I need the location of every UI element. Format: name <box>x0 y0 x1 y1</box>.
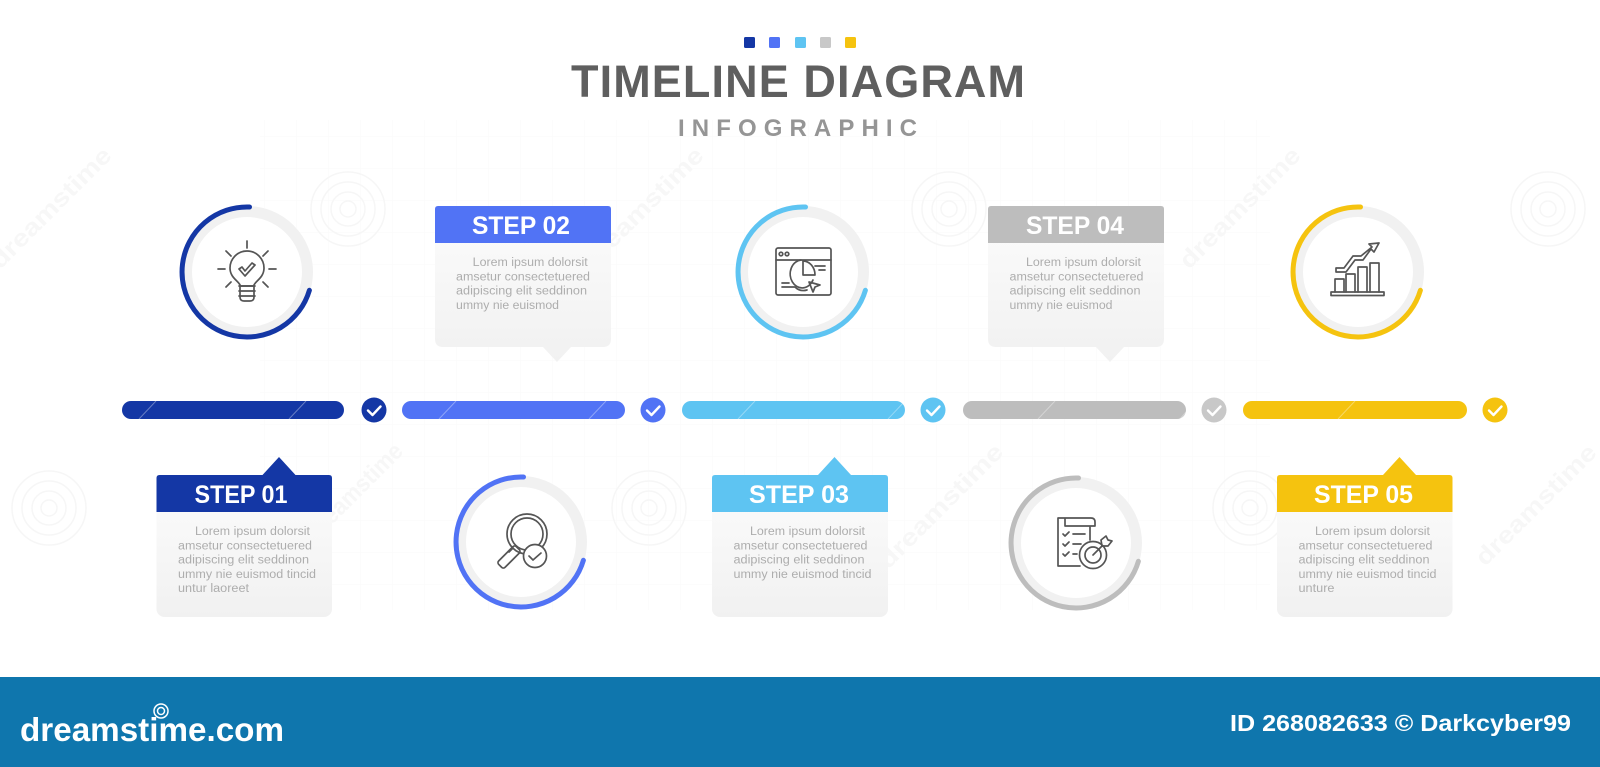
body text: adipiscing elit seddinon <box>1298 555 1430 567</box>
icon: magnifier <box>497 514 547 569</box>
body text: adipiscing elit seddinon <box>456 286 587 298</box>
footer banner <box>0 677 1600 767</box>
body text: amsetur consectetuered <box>456 271 590 283</box>
icon: checklist with target <box>1058 518 1112 568</box>
body text: adipiscing elit seddinon <box>734 555 864 567</box>
heading: STEP 02 <box>472 212 570 240</box>
step 03 card <box>712 457 888 617</box>
colour legend squares <box>744 37 856 48</box>
heading: STEP 01 <box>194 481 288 509</box>
step 04 card <box>988 206 1164 362</box>
step 02 ring and magnifier icon <box>456 477 583 607</box>
timeline bars <box>122 401 1467 419</box>
icon: rising bar chart <box>1331 243 1384 296</box>
watermark spirals and text: dreamstime <box>873 438 1009 574</box>
body text: Lorem ipsum dolorsit <box>750 526 866 538</box>
watermark spirals and text: dreamstime <box>301 438 409 545</box>
check markers <box>362 398 1508 422</box>
heading: STEP 03 <box>749 481 849 509</box>
step 05 card <box>1277 457 1452 617</box>
title: TIMELINE DIAGRAM <box>571 56 1025 107</box>
step 02 card <box>435 206 611 362</box>
body text: ummy nie euismod tincid <box>734 569 872 581</box>
body text <box>456 257 590 312</box>
watermark spirals and text <box>0 142 1600 574</box>
heading: STEP 04 <box>1026 212 1124 240</box>
logo text: dreamstime.com <box>20 711 284 748</box>
body text <box>734 526 872 581</box>
step 01 ring and bulb icon <box>182 207 309 337</box>
body text: Lorem ipsum dolorsit <box>1315 526 1431 538</box>
body text: amsetur consectetuered <box>734 540 868 552</box>
body text: ummy nie euismod tincid <box>1298 569 1436 581</box>
subtitle: INFOGRAPHIC <box>678 115 917 142</box>
body text: Lorem ipsum dolorsit <box>473 257 589 269</box>
watermark spirals and text: dreamstime <box>577 142 709 274</box>
body text: amsetur consectetuered <box>1010 271 1144 283</box>
image id and credit: ID 268082633 © Darkcyber99 <box>1230 710 1571 736</box>
body text: amsetur consectetuered <box>1298 540 1432 552</box>
body text: ummy nie euismod <box>456 300 559 312</box>
body text <box>1298 526 1436 595</box>
body text: Lorem ipsum dolorsit <box>1026 257 1142 269</box>
body text: adipiscing elit seddinon <box>1010 286 1140 298</box>
body text: amsetur consectetuered <box>178 540 312 552</box>
watermark spirals and text: dreamstime <box>1174 142 1306 274</box>
body text: untur laoreet <box>178 583 250 595</box>
step 03 ring and browser chart icon <box>738 207 865 337</box>
heading: STEP 05 <box>1314 481 1413 509</box>
body text <box>1010 257 1144 312</box>
body text: adipiscing elit seddinon <box>178 555 309 567</box>
step 05 ring and growth chart icon <box>1293 207 1420 337</box>
body text: ummy nie euismod <box>1010 300 1112 312</box>
body text: unture <box>1298 583 1334 595</box>
logo swirl <box>154 704 168 718</box>
body text: Lorem ipsum dolorsit <box>195 526 311 538</box>
body text <box>178 526 316 595</box>
step 01 card <box>156 457 332 617</box>
body text: ummy nie euismod tincid <box>178 569 316 581</box>
watermark spirals and text: dreamstime <box>1470 439 1600 571</box>
icon: light bulb <box>218 241 276 301</box>
step 04 ring and checklist target icon <box>1011 478 1138 608</box>
icon: browser window <box>776 248 831 295</box>
